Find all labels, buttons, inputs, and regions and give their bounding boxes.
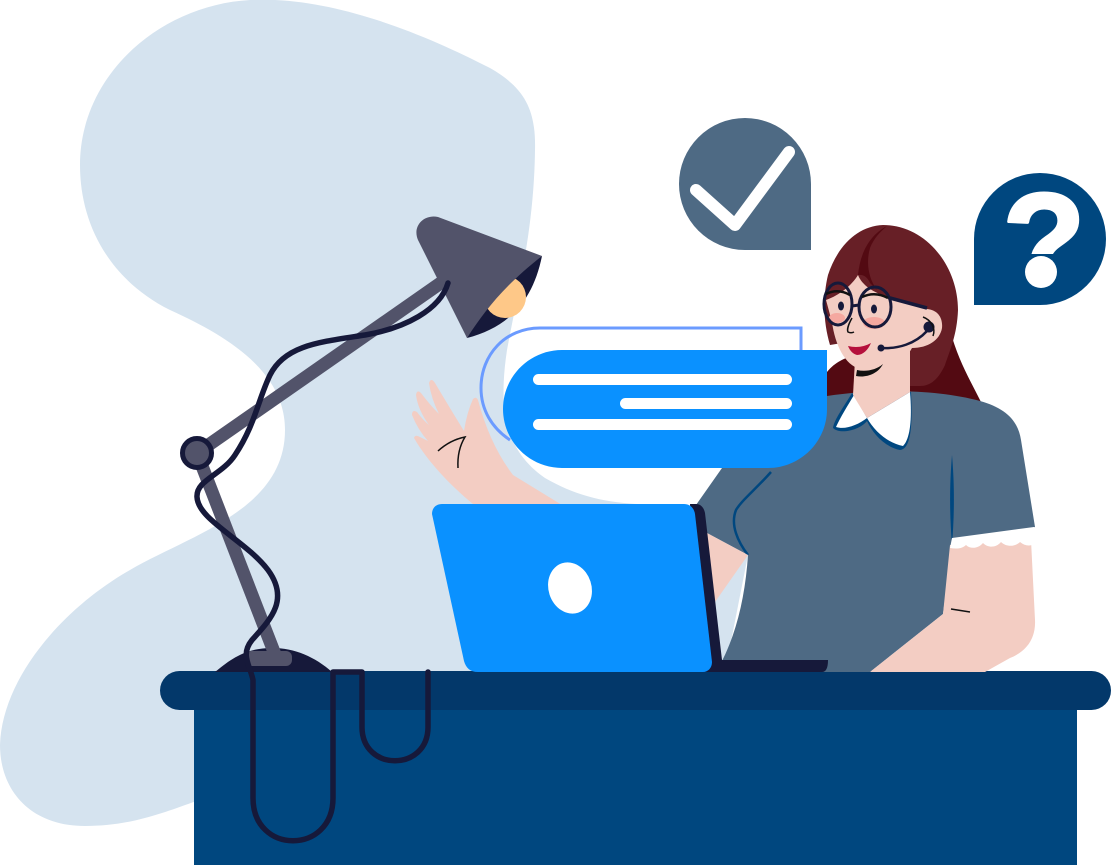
desk — [160, 671, 1111, 865]
background blob — [0, 0, 748, 826]
bulb — [484, 276, 526, 318]
cord — [197, 283, 448, 841]
question bubble — [974, 173, 1106, 305]
chin shadow — [856, 364, 883, 376]
person — [696, 225, 1036, 672]
lamp arm — [197, 280, 445, 453]
right arm — [870, 540, 1035, 672]
nose — [848, 318, 854, 333]
logo — [542, 557, 598, 619]
hair parting — [858, 226, 887, 290]
lenses — [824, 283, 852, 325]
waving hand — [412, 380, 562, 505]
left forearm — [707, 533, 748, 602]
hair — [824, 225, 958, 386]
laptop — [432, 504, 828, 672]
filled speech bubble — [503, 350, 827, 468]
question dot — [1025, 256, 1057, 288]
mouth — [848, 343, 871, 355]
cuff — [950, 527, 1036, 549]
headset — [878, 317, 934, 352]
check bubble — [679, 118, 811, 250]
outline speech bubble — [481, 328, 801, 440]
face — [826, 275, 942, 370]
neck — [853, 345, 910, 418]
back hair — [827, 330, 981, 402]
shirt folds — [734, 455, 954, 555]
collar — [833, 392, 912, 450]
message lines — [533, 374, 792, 430]
lens — [467, 256, 542, 338]
shirt — [696, 391, 1035, 672]
lamp base — [215, 648, 332, 672]
question bubble: ? — [1002, 165, 1086, 317]
blush — [829, 313, 845, 323]
shade — [416, 217, 542, 338]
desk lamp — [182, 217, 542, 841]
elbow mark — [951, 609, 970, 612]
joint — [182, 438, 212, 468]
glasses — [824, 283, 927, 329]
eyes — [838, 302, 877, 314]
